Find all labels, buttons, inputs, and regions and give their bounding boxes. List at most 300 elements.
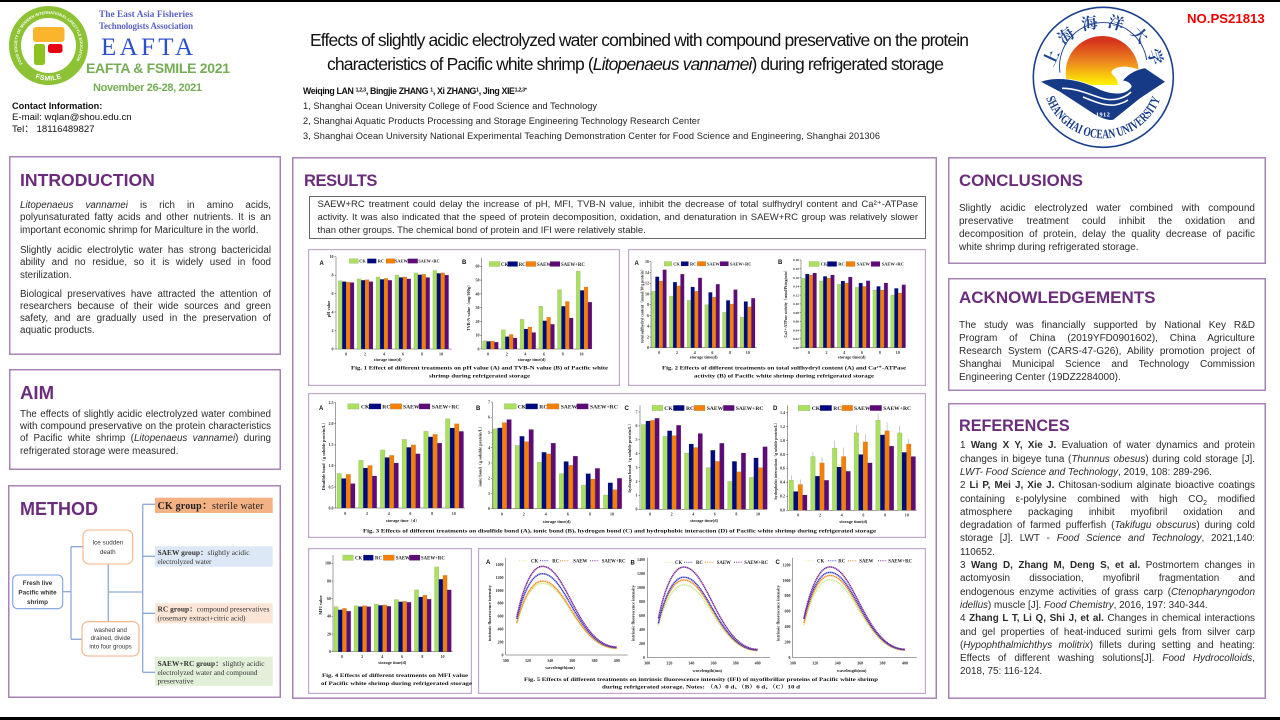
- chart: IFI at 0 d: RC: [552, 560, 560, 564]
- chart: IFI at 0 d: 1400: [496, 562, 504, 567]
- box: washed and drained: [82, 622, 139, 656]
- chart: pH value: 8: [421, 352, 423, 356]
- text: reference list: changes in bigeye tuna (Thunnus obesus) during cold storage [J].: [960, 454, 1255, 465]
- heading: introduction: INTRODUCTION: [20, 170, 155, 190]
- caption: figure 1: shrimp during refrigerated storage: [429, 374, 531, 380]
- chart: Ca2+-ATPase activity: CK: [821, 262, 828, 267]
- chart: ionic bond: 7: [488, 399, 490, 404]
- EAFTA wordmark: EAFTA: [101, 34, 193, 61]
- chart: disulfide bond: A: [319, 406, 324, 412]
- text: reference list: 2018, 75: 116-124.: [960, 666, 1042, 677]
- chart: IFI at 6 d: SAEW+RC: [744, 561, 769, 566]
- caption: figure 5: during refrigerated storage. Notes: （A）0 d、（B）6 d、（C）10 d: [602, 684, 801, 691]
- chart: TVB-N value: CK: [501, 263, 508, 268]
- text: reference list: 2 Li P, Mei J, Xie J. Chitosan-sodium alginate bioactive coatings: [960, 480, 1255, 491]
- chart: ionic bond: storage time(d): [543, 519, 571, 524]
- chart: Ca2+-ATPase activity: 0.08: [793, 311, 799, 315]
- chart: MFI value: MFI value: [318, 595, 323, 615]
- chart: hydrogen bond: 0: [649, 512, 651, 516]
- chart: TVB-N value: 2: [506, 352, 508, 356]
- chart: Ca2+-ATPase activity: 0.12: [793, 293, 799, 297]
- panel: references: [948, 403, 1266, 699]
- chart: disulfide bond: Disulfide bond（g soluble protein/L）: [321, 420, 326, 490]
- chart: IFI at 6 d: 1000: [637, 585, 645, 590]
- text: reference list: LWT- Food Science and Technology, 2019, 108: 289-296.: [960, 467, 1212, 478]
- chart: IFI at 10 d: 380: [880, 660, 886, 666]
- chart: total sulfhydryl content: 4: [647, 324, 649, 328]
- text: intro paragraph 1: Litopenaeus vannamei is rich in amino acids,: [20, 200, 271, 211]
- chart: hydrophobic interactions: 4: [841, 512, 843, 518]
- chart: IFI at 10 d: 0: [788, 655, 790, 660]
- caption: figure 3: Fig. 3 Effects of different treatments on disulfide bond (A), ionic bond (B), hydrogen bond (C) and hydrophobic interaction (D) of Pacific white shrimp during refrigerated storage: [363, 528, 877, 534]
- chart: MFI value: RC: [375, 556, 382, 562]
- chart: IFI at 6 d: 1400: [637, 557, 645, 562]
- chart: TVB-N value: 30: [476, 305, 480, 310]
- chart: MFI value: storage time(d): [378, 660, 407, 665]
- text: acknowledgements: Program of China (2019YFD0901602), China Agriculture: [959, 333, 1255, 344]
- chart: Ca2+-ATPase activity: 0.14: [793, 284, 799, 288]
- chart: hydrophobic interactions: 6: [862, 512, 864, 518]
- chart: MFI value: 80: [327, 578, 331, 583]
- chart: IFI at 6 d: B: [630, 560, 636, 566]
- contact information: Tel： 18116489827: [12, 124, 95, 135]
- chart: hydrogen bond: 8: [735, 512, 737, 516]
- icon: FSMILE round logo: [9, 6, 88, 85]
- group: SAEW+RC: SAEW+RC group：slightly acidic: [158, 659, 265, 668]
- panel: acknowledgements: [948, 278, 1266, 391]
- icon: FSMILE round logo: FSMILE: [36, 74, 62, 80]
- bottom black bar: [0, 717, 1280, 720]
- chart: IFI at 10 d: 340: [835, 660, 841, 666]
- chart: IFI at 0 d: 300: [503, 658, 509, 663]
- chart: TVB-N value: storage time(d): [518, 357, 546, 362]
- chart: TVB-N value: 4: [524, 352, 526, 356]
- chart: total sulfhydryl content: 4: [694, 350, 696, 355]
- authors: Weiqing LAN: [303, 86, 354, 96]
- group: SAEW+RC: electrolyzed water and compound: [158, 668, 258, 677]
- chart: IFI at 0 d: wavelength(nm): [545, 665, 575, 670]
- chart: hydrogen bond: 4: [636, 451, 638, 456]
- text: intro paragraph 2: ability and no residue, so it is widely used in food: [20, 257, 271, 268]
- chart: TVB-N value: 8: [562, 352, 564, 356]
- text: reference list: storage [J]. LWT - Food Science and Technology, 2021,140:: [960, 533, 1255, 544]
- chart: MFI value: 6: [401, 654, 403, 659]
- chart: MFI value: 100: [325, 561, 331, 566]
- chart: disulfide bond: 0: [344, 511, 346, 516]
- top black bar: [0, 0, 1280, 2]
- text: intro paragraph 1: important economic shrimp for Mariculture in the world.: [20, 225, 258, 236]
- chart: ionic bond: 3: [488, 460, 490, 465]
- chart: ionic bond: 0: [488, 506, 490, 511]
- chart: total sulfhydryl content: CK: [673, 261, 680, 266]
- authors: , Xi ZHANG: [433, 86, 477, 96]
- chart: IFI at 6 d: SAEW: [717, 561, 731, 566]
- results summary text: activity. It was also indicated that the speed of protein decomposition, oxidation, and denaturation in SAEW+RC group was relatively slower: [318, 212, 918, 222]
- text: aim: refrigerated storage were measured.: [20, 446, 178, 457]
- chart: pH value: 2: [332, 328, 334, 333]
- chart: hydrophobic interactions: [773, 405, 917, 524]
- chart: pH value: storage time(d): [374, 357, 402, 362]
- chart: ionic bond: 6: [567, 512, 569, 516]
- chart: pH value: 4: [383, 352, 385, 356]
- chart: TVB-N value: 60: [476, 264, 480, 269]
- authors: 1,2,3*: [515, 88, 528, 94]
- chart: pH value: 0: [332, 346, 334, 352]
- chart: hydrophobic interactions: 8: [884, 512, 886, 518]
- chart: ionic bond: ionic bond（g soluble protein/L）: [478, 424, 482, 486]
- chart: hydrophobic interactions: 1.0: [780, 438, 785, 443]
- results summary text: [309, 196, 926, 239]
- chart: IFI at 10 d: 300: [790, 660, 796, 666]
- chart: ionic bond: 0: [501, 512, 503, 516]
- chart: hydrogen bond: 0: [636, 507, 638, 512]
- chart: TVB-N value: 6: [543, 352, 545, 356]
- chart: ionic bond: 1: [488, 491, 490, 496]
- chart: IFI at 6 d: [630, 557, 770, 673]
- chart: TVB-N value: 10: [580, 352, 584, 356]
- chart: IFI at 0 d: 340: [547, 658, 553, 663]
- chart: TVB-N value: SAEW+RC: [561, 263, 585, 268]
- text: acknowledgements: Research System (CARS-47-G26), Ability promotion project of: [959, 346, 1255, 357]
- chart: disulfide bond: 2.0: [328, 421, 334, 426]
- chart: IFI at 0 d: 380: [592, 658, 598, 663]
- title: characteristics of Pacific white shrimp (Litopenaeus vannamei) during refrigerated storage: [327, 54, 944, 74]
- icon: Shanghai Ocean University logo: 上海海洋大学: [1044, 14, 1164, 67]
- chart: total sulfhydryl content: RC: [690, 261, 696, 266]
- text: aim: The effects of slightly acidic electrolyzed water combined: [20, 408, 271, 420]
- chart: ionic bond: 6: [488, 415, 490, 420]
- chart: Ca2+-ATPase activity: 0.10: [793, 302, 799, 306]
- chart: IFI at 10 d: 800: [784, 593, 790, 598]
- title: Effects of slightly acidic electrolyzed water combined with compound preservative on the protein: [310, 30, 969, 50]
- chart: MFI value: [318, 555, 453, 665]
- chart: IFI at 6 d: 0: [643, 655, 645, 660]
- caption: figure 4: Fig. 4 Effects of different treatments on MFI value: [322, 673, 469, 679]
- chart: TVB-N value: SAEW: [537, 263, 551, 268]
- caption: figure 5: Fig. 5 Effects of different treatments on intrinsic fluorescence intensity (IFI) of myofibrillar proteins of Pacific white shrimp: [524, 676, 878, 683]
- chart: IFI at 6 d: wavelength(nm): [692, 668, 723, 673]
- group: SAEW: electrolyzed water: [158, 557, 212, 566]
- chart: disulfide bond: 8: [431, 511, 433, 516]
- text: reference list: [960, 440, 1255, 677]
- chart: ionic bond: RC: [539, 404, 547, 410]
- chart: Ca2+-ATPase activity: 6: [861, 350, 863, 355]
- chart: total sulfhydryl content: 14: [645, 270, 649, 275]
- chart: ionic bond: 4: [545, 512, 547, 516]
- chart: ionic bond: B: [476, 406, 481, 412]
- chart: Ca2+-ATPase activity: 0.06: [793, 320, 799, 324]
- chart: MFI value: 40: [327, 614, 331, 619]
- chart: disulfide bond: [319, 400, 465, 523]
- text: reference list: containing ε-polylysine combined with high CO2 modified: [960, 494, 1255, 507]
- chart: Ca2+-ATPase activity: SAEW+RC: [882, 262, 904, 267]
- chart: ionic bond: 2: [523, 512, 525, 516]
- chart: hydrogen bond: 6: [636, 423, 638, 428]
- chart: disulfide bond: SAEW+RC: [432, 404, 459, 410]
- group: SAEW: SAEW group：slightly acidic: [158, 548, 250, 557]
- chart: IFI at 0 d: 0: [502, 652, 504, 657]
- chart: hydrophobic interactions: 0: [797, 512, 799, 518]
- chart: IFI at 10 d: [776, 558, 917, 673]
- chart: pH value: 10: [330, 254, 334, 259]
- chart: disulfide bond: 4: [388, 511, 390, 516]
- chart: ionic bond: 8: [589, 512, 591, 516]
- heading: references: REFERENCES: [959, 417, 1070, 435]
- icon: Shanghai Ocean University logo: 1912: [1096, 112, 1110, 118]
- text: reference list: idellus) muscle [J]. Food Chemistry, 2016, 197: 340-344.: [960, 600, 1208, 611]
- heading: aim: AIM: [20, 382, 54, 403]
- chart: IFI at 0 d: intrinsic fluorescence intensity: [487, 584, 492, 641]
- chart: IFI at 6 d: 600: [639, 613, 645, 618]
- chart: total sulfhydryl content: A: [634, 261, 640, 267]
- caption: figure 2: Fig. 2 Effects of different treatments on total sulfhydryl content (A) and Ca²⁺-ATPase: [662, 365, 907, 372]
- caption: figure 1: Fig. 1 Effect of different treatments on pH value (A) and TVB-N value (B) of Pacific white: [351, 365, 609, 372]
- chart: Ca2+-ATPase activity: 10: [896, 350, 900, 355]
- chart: IFI at 6 d: intrinsic fluorescence intensity: [630, 584, 636, 641]
- chart: disulfide bond: SAEW: [403, 404, 420, 410]
- chart: total sulfhydryl content: 8: [647, 302, 649, 307]
- chart: MFI value: 10: [440, 654, 444, 659]
- heading: method: METHOD: [20, 499, 98, 519]
- figure 3: [308, 393, 926, 538]
- chart: total sulfhydryl content: 8: [729, 350, 731, 355]
- chart: IFI at 6 d: CK: [675, 561, 682, 566]
- box: fresh shrimp: Pacific white: [18, 590, 57, 596]
- text: intro paragraph 1: polyunsaturated fatty acids and other nutrients. It is an: [20, 212, 271, 223]
- panel: method: [8, 485, 281, 698]
- chart: TVB-N value: 20: [476, 319, 480, 324]
- text: intro paragraph 3: [20, 289, 271, 336]
- chart: Ca2+-ATPase activity: 0.00: [793, 346, 799, 350]
- chart: hydrogen bond: 6: [714, 512, 716, 516]
- chart: IFI at 6 d: 800: [639, 599, 645, 604]
- chart: Ca2+-ATPase activity: 0.02: [793, 337, 799, 341]
- affiliations: [303, 101, 880, 141]
- chart: total sulfhydryl content: SAEW+RC: [730, 261, 751, 266]
- group: RC: [155, 603, 273, 623]
- contact information: Contact Information:: [12, 101, 102, 111]
- text: aim: with compound preservative on the protein characteristics: [20, 421, 271, 432]
- chart: pH value: 10: [439, 352, 443, 356]
- chart: MFI value: SAEW: [396, 556, 410, 562]
- chart: disulfide bond: 1.5: [328, 442, 334, 447]
- text: reference list: atmosphere packaging inhibit myofibril oxidation and: [960, 507, 1255, 518]
- text: conclusions: preservative treatment could inhibit the oxidation and: [959, 216, 1255, 226]
- chart: hydrophobic interactions: 0.8: [780, 452, 785, 457]
- title and authors: [303, 30, 969, 141]
- chart: IFI at 10 d: wavelength(nm): [837, 668, 867, 673]
- chart: ionic bond: CK: [518, 404, 527, 410]
- chart: Ca2+-ATPase activity: 0.18: [793, 267, 799, 271]
- title: [310, 30, 969, 74]
- chart: hydrophobic interactions: CK: [812, 406, 821, 412]
- chart: TVB-N value: 50: [476, 278, 480, 282]
- chart: IFI at 10 d: SAEW: [859, 560, 874, 564]
- chart: Ca2+-ATPase activity: 0: [808, 350, 810, 355]
- chart: IFI at 10 d: SAEW+RC: [888, 560, 913, 564]
- caption: figure 2: activity (B) of Pacific white shrimp during refrigerated storage: [694, 372, 875, 379]
- chart: pH value: pH value: [326, 301, 331, 317]
- chart: IFI at 10 d: 1200: [782, 562, 790, 567]
- chart: hydrophobic interactions: 10: [905, 512, 909, 518]
- chart: hydrogen bond: 5: [636, 437, 638, 442]
- authors: 1: [476, 88, 479, 94]
- text: conclusions: decomposition of protein, delay the quality decrease of pacific: [959, 228, 1255, 240]
- chart: IFI at 0 d: CK: [531, 560, 538, 564]
- chart: pH value: 6: [332, 291, 334, 296]
- chart: MFI value: SAEW+RC: [421, 556, 445, 562]
- chart: IFI at 0 d: SAEW+RC: [602, 560, 626, 564]
- chart: hydrophobic interactions: SAEW: [854, 406, 871, 412]
- text: aim: [20, 408, 271, 457]
- chart: Ca2+-ATPase activity: 0.16: [793, 276, 799, 280]
- chart: total sulfhydryl content: [634, 259, 757, 360]
- chart: disulfide bond: 2.5: [328, 400, 334, 405]
- contact information: [12, 101, 132, 135]
- text: reference list: (Hypophthalmichthys molitrix) fillets during setting and heating:: [960, 640, 1255, 651]
- text: acknowledgements: Shanghai Municipal Science and Technology Commission: [959, 359, 1255, 370]
- authors: , Bingjie ZHANG: [366, 86, 431, 96]
- chart: pH value: 6: [402, 352, 404, 356]
- chart: Ca2+-ATPase activity: 8: [879, 350, 881, 355]
- chart: hydrophobic interactions: SAEW+RC: [883, 406, 911, 412]
- chart: hydrogen bond: 2: [636, 479, 638, 484]
- contact information: E-mail: wqlan@shou.edu.cn: [12, 112, 132, 123]
- chart: MFI value: 8: [421, 654, 423, 659]
- chart: hydrogen bond: 7: [636, 409, 638, 414]
- chart: hydrogen bond: hydrogen bond（g soluble protein/L）: [627, 422, 632, 492]
- chart: IFI at 10 d: intrinsic fluorescence intensity: [776, 584, 780, 641]
- chart: TVB-N value: 0: [487, 352, 489, 356]
- chart: MFI value: CK: [355, 556, 362, 562]
- chart: IFI at 10 d: 200: [784, 640, 790, 645]
- chart: IFI at 10 d: 600: [784, 609, 790, 614]
- text: intro paragraph 2: [20, 245, 271, 281]
- figure 4: [308, 548, 472, 694]
- chart: TVB-N value: B: [462, 260, 467, 266]
- box: washed and drained: drained, divide: [91, 635, 131, 642]
- chart: IFI at 6 d: 1200: [637, 571, 645, 576]
- chart: total sulfhydryl content: 16: [645, 259, 649, 264]
- chart: hydrogen bond: RC: [686, 406, 694, 412]
- text: reference list: endogenous enzyme activities of grass carp (Ctenopharyngodon: [960, 587, 1255, 598]
- flow diagram: [12, 498, 273, 686]
- chart: Ca2+-ATPase activity: 2: [826, 350, 828, 355]
- group: SAEW: [155, 546, 273, 567]
- chart: IFI at 0 d: 800: [498, 601, 504, 606]
- chart: TVB-N value: 10: [476, 333, 480, 338]
- box: ice sudden death: Ice sudden: [92, 540, 124, 546]
- chart: IFI at 0 d: 360: [569, 658, 575, 663]
- chart: IFI at 10 d: 400: [784, 624, 790, 629]
- chart: hydrogen bond: SAEW+RC: [736, 406, 763, 412]
- chart: pH value: CK: [359, 258, 366, 264]
- icon: Shanghai Ocean University logo: [1032, 6, 1174, 148]
- chart: IFI at 6 d: 300: [644, 660, 650, 666]
- chart: IFI at 0 d: 600: [498, 614, 504, 619]
- chart: MFI value: 0: [329, 649, 331, 654]
- chart: pH value: 2: [364, 352, 366, 356]
- chart: disulfide bond: 10: [452, 511, 456, 516]
- chart: IFI at 0 d: 320: [525, 658, 531, 663]
- text: reference list: 4 Zhang L T, Li Q, Shi J, et al. Changes in chemical interactions: [960, 613, 1255, 624]
- group: CK: [155, 498, 273, 513]
- chart: IFI at 0 d: SAEW: [573, 560, 588, 564]
- chart: MFI value: 0: [341, 654, 343, 659]
- caption: figure 4: of Pacific white shrimp during refrigerated storage: [321, 681, 472, 687]
- text: reference list: degradation of farmed pufferfish (Takifugu obscurus) during cold: [960, 520, 1255, 531]
- group: RC: (rosemary extract+citric acid): [158, 614, 246, 622]
- poster number: NO.PS21813: [1187, 11, 1265, 26]
- chart: IFI at 0 d: 1200: [496, 575, 504, 580]
- organiser name: Technologists Association: [99, 21, 193, 31]
- chart: Ca2+-ATPase activity: Ca2+-ATPase activity（umol/Pi/mg/min）: [783, 268, 788, 338]
- chart: ionic bond: 4: [488, 445, 490, 450]
- figure 5: [478, 548, 926, 694]
- chart: hydrogen bond: 2: [671, 512, 673, 516]
- box: ice sudden death: [83, 530, 133, 564]
- group: SAEW+RC: [155, 657, 273, 686]
- chart: total sulfhydryl content: 0: [647, 345, 649, 350]
- conference name: EAFTA & FSMILE 2021: [86, 60, 230, 76]
- chart: IFI at 6 d: 400: [639, 627, 645, 632]
- chart: disulfide bond: storage time（d）: [386, 518, 419, 523]
- chart: total sulfhydryl content: storage time(d): [690, 354, 718, 360]
- panel: aim: [9, 369, 281, 470]
- chart: IFI at 10 d: 360: [857, 660, 863, 666]
- group: CK: CK group：sterile water: [158, 501, 264, 512]
- chart: IFI at 10 d: RC: [838, 560, 846, 564]
- chart: TVB-N value: 40: [476, 291, 480, 296]
- chart: hydrophobic interactions: RC: [833, 406, 841, 412]
- chart: MFI value: 4: [381, 654, 383, 659]
- chart: total sulfhydryl content: 10: [746, 350, 750, 355]
- conference date: November 26-28, 2021: [93, 82, 202, 94]
- chart: hydrophobic interactions: 1.4: [780, 410, 785, 415]
- chart: total sulfhydryl content: 0: [658, 350, 660, 355]
- chart: ionic bond: 2: [488, 476, 490, 480]
- chart: IFI at 10 d: 400: [902, 660, 908, 666]
- text: intro paragraph 2: Slightly acidic electrolytic water has strong bactericidal: [20, 245, 271, 256]
- chart: hydrogen bond: storage time(d): [690, 518, 718, 523]
- chart: IFI at 6 d: 380: [733, 660, 739, 666]
- chart: ionic bond: SAEW+RC: [590, 404, 618, 410]
- chart: hydrophobic interactions: 0.0: [780, 508, 785, 513]
- text: reference list: actomyosin dissociation, myofibril fragmentation and: [960, 573, 1255, 584]
- chart: IFI at 10 d: 1000: [782, 578, 790, 583]
- heading: results: RESULTS: [304, 172, 377, 190]
- chart: disulfide bond: 6: [409, 511, 411, 516]
- chart: MFI value: 2: [361, 654, 363, 659]
- chart: pH value: A: [320, 261, 324, 267]
- text: conclusions: Slightly acidic electrolyzed water combined with compound: [959, 202, 1255, 214]
- chart: IFI at 6 d: 340: [688, 660, 694, 666]
- chart: MFI value: 60: [327, 596, 331, 601]
- box: fresh shrimp: Fresh live: [23, 580, 53, 587]
- chart: total sulfhydryl content: 6: [711, 350, 713, 355]
- conference logo block: [9, 6, 230, 94]
- chart: total sulfhydryl content: 2: [676, 350, 678, 355]
- chart: hydrophobic interactions: 0.6: [780, 466, 785, 471]
- chart: Ca2+-ATPase activity: B: [778, 260, 783, 266]
- chart: IFI at 0 d: 200: [498, 639, 504, 644]
- chart: pH value: RC: [378, 258, 384, 264]
- chart: disulfide bond: 0.5: [328, 484, 334, 489]
- chart: hydrophobic interactions: 0.4: [780, 480, 785, 485]
- chart: IFI at 6 d: RC: [696, 561, 703, 566]
- figure 1: [308, 249, 620, 386]
- caption: figure 2: [662, 365, 907, 379]
